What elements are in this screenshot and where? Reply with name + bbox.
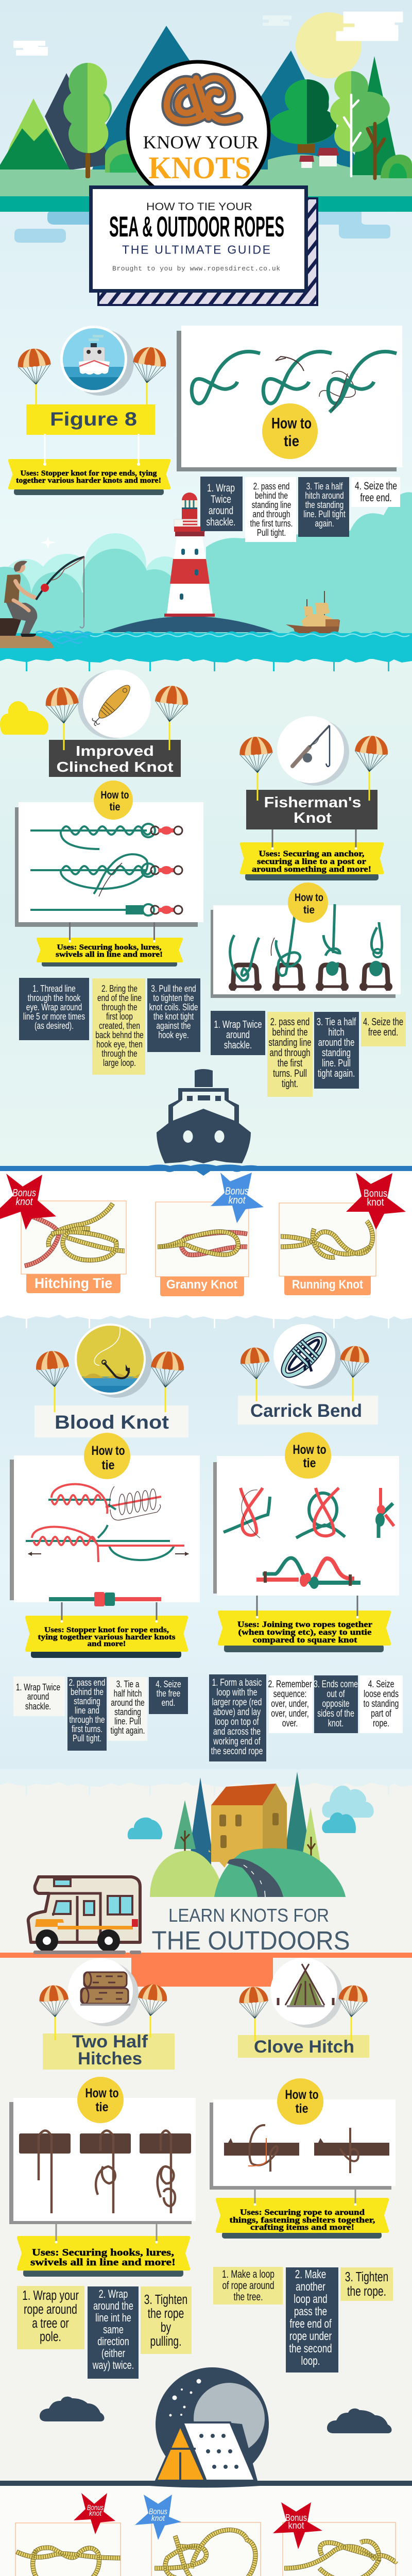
bonus star 6: Bonus [285,2513,307,2523]
step 2: (either [101,2347,126,2360]
step 1: around [226,1029,250,1041]
step 1: Twice [211,493,231,505]
water [0,633,412,659]
step 2: behind the [71,1687,104,1698]
how to tie badge: How to [285,2088,318,2102]
uses banner: securing a line to a post or [257,857,366,866]
step 1: and across the [213,1726,261,1737]
how to tie diagram [211,904,401,998]
bonus star 5: Bonus [149,2507,167,2516]
icon: logs in circle [68,1958,139,2026]
step 4: part of [371,1708,391,1719]
bonus star 5 [135,2495,181,2540]
step 3: 3. Tie a [116,1679,140,1690]
step 1 [209,1674,266,1761]
step 3: 3. Tie a half [306,481,343,492]
icon: hook in circle [75,1324,152,1398]
step 4: the free [157,1688,180,1699]
step 2: free end of [289,2318,332,2331]
step 3: 3. Ends come [314,1679,358,1690]
heading: Figure 8 [50,409,137,430]
step 2: direction [97,2335,129,2348]
step 2 [245,477,296,542]
uses banner [37,922,183,967]
step 3: 3. Pull the end [151,984,196,994]
heading [26,404,155,435]
step 1: the second rope [211,1745,263,1757]
step 2: another [296,2281,325,2294]
step 1: (as desired). [35,1021,74,1031]
step 3: 3. Tie a half [317,1016,356,1028]
step 1: around [209,504,233,517]
how to tie badge: How to [295,892,323,904]
uses banner [216,2190,389,2239]
how to tie badge: How to [293,1443,327,1457]
step 3: hook eye. [158,1030,189,1041]
knot panel: Blood Knot [10,1324,200,1751]
bonus star 1: knot [15,1196,33,1208]
subtitle panel: Brought to you by www.ropesdirect.co.uk [112,265,280,273]
step 3: standing [114,1707,141,1718]
how to tie badge: tie [303,904,315,916]
step 2: way) twice. [92,2359,134,2372]
how to tie badge: tie [303,1456,316,1470]
bonus card: Granny Knot [156,1202,249,1296]
step 1 [13,1676,65,1716]
uses banner: tying together various harder knots [38,1633,176,1641]
step 4 [359,1675,403,1733]
step 2: sequence: [273,1688,306,1700]
how to tie badge: How to [101,789,129,801]
step 2: hook eye, then [96,1039,143,1050]
step 2: end of the line [97,993,142,1004]
icon: rope coil in circle [273,1324,341,1389]
step 2: Pull tight. [257,528,286,538]
bonus star 1: Bonus [12,1188,36,1199]
step 4: 4. Seize the [355,480,397,492]
parachutes [39,1982,168,2040]
how to tie diagram [10,1455,200,1606]
knot panel: Carrick Bend [209,1324,403,1761]
how to tie badge [94,781,133,820]
bonus star 3 [346,1173,406,1230]
step 2: and through [252,509,290,520]
step 1: above) and lay [213,1706,261,1718]
step 2: 2. Make [295,2268,326,2281]
how to tie diagram [15,802,203,927]
step 1: 1. Wrap Twice [214,1019,262,1030]
how to tie badge [262,403,318,459]
step 2 [88,2286,139,2379]
bonus star 2 [211,1173,264,1223]
section heading: Learn knots for the outdoors: THE OUTDOORS [151,1926,350,1955]
step 3: the rope [148,2306,184,2321]
step 3: line. Pull tight [303,509,346,520]
step 2: same [103,2324,124,2336]
step 2: the first [278,1057,302,1069]
step 3: hitch around [305,490,344,501]
step 1: shackle. [224,1039,252,1051]
step 4: end. [162,1698,175,1708]
step 1: 1. Form a basic [212,1677,262,1688]
step 2: 2. pass end [270,1016,310,1028]
icon: camper van [28,1877,141,1954]
icon: tent in circle [270,1958,342,2028]
sailing ship [286,591,340,637]
step 3: the knot tight [153,1011,194,1022]
step 2: 2. Remember [268,1679,312,1690]
step 2: around the [93,2300,133,2313]
fisherman with rod [0,557,84,637]
subtitle panel: HOW TO TIE YOUR [146,201,252,213]
step 2: over, under, [271,1698,309,1709]
step 3 [141,2286,192,2354]
step 2: standing line [252,500,291,511]
subtitle panel: THE ULTIMATE GUIDE [122,243,270,257]
step 4: loose ends [364,1688,399,1700]
step 2: loop and [294,2293,328,2306]
step 1: shackle. [25,1701,51,1712]
step 2: turns. Pull [273,1067,307,1079]
step 2: and through [270,1047,310,1059]
step 1 [17,2286,84,2349]
icon: fishing lure in circle [78,670,151,739]
step 3: line. Pull [114,1716,141,1727]
heading: Blood Knot [55,1412,169,1433]
step 4: 4. Seize the [363,1016,403,1028]
uses banner: things, fastening shelters together, [230,2216,375,2225]
step 3: opposite [322,1698,350,1709]
step 1: of rope around [222,2279,274,2292]
step 2: Pull tight. [73,1733,101,1744]
knot panel: Figure 8 [8,326,402,542]
step 1 [213,2267,283,2304]
step 3 [298,477,349,537]
step 3: sides of the [317,1708,354,1719]
step 3 [314,1675,358,1733]
heading [35,1405,188,1437]
step 3: tight again. [318,1067,355,1079]
step 3: half hitch [114,1688,142,1699]
how to tie badge: tie [296,2102,308,2116]
knot panel: Clove Hitch [210,1958,396,2372]
step 4: rope. [373,1718,389,1729]
step 2: large loop. [103,1058,136,1069]
step 2: created, then [99,1021,140,1031]
section heading: Learn knots for the outdoors: LEARN KNOTS FOR [168,1905,329,1926]
step 2: through the [101,1048,138,1059]
uses banner: and more! [88,1640,126,1648]
parachutes [35,1349,185,1412]
how to tie diagram [9,2098,196,2224]
heading: Carrick Bend [250,1401,362,1421]
uses banner: Uses: Securing hooks, lures, [32,2247,174,2258]
parachutes [238,734,389,801]
step 3: tight again. [111,1725,145,1736]
uses banner: compared to square knot [252,1636,357,1645]
step 2 [286,2267,338,2372]
bonus star 4 [74,2493,115,2534]
heading: Clove Hitch [254,2037,354,2057]
uses banner [17,2224,190,2277]
parachutes [239,1345,370,1401]
how to tie diagram [177,326,402,471]
step 2: through the [101,1002,138,1013]
step 4: free end. [360,492,392,504]
how to tie badge: tie [102,1458,115,1472]
how to tie badge: tie [96,2100,109,2114]
step 2: back behnd the [95,1030,144,1041]
step 4: 4. Seize [156,1679,181,1690]
title badge: Know Your Knots: KNOTS [148,151,251,185]
bonus star 6 [273,2502,322,2549]
step 1: 1. Wrap your [22,2287,79,2303]
uses banner: swivels all in line and more! [30,2257,176,2268]
header scenery: mountains, trees, sun and clouds [0,12,412,243]
step 1: loop with the [217,1687,257,1698]
night scene: moon, cabin and clouds [0,2367,412,2487]
step 1: a tree or [32,2315,69,2331]
bonus card: Running Knot: Running Knot [292,1278,363,1292]
step 3: standing [322,1047,351,1059]
step 1 [211,1011,265,1055]
parachutes [238,1984,369,2041]
heading [238,2035,369,2058]
step 2: behind the [255,490,288,501]
step 1: 1. Wrap [207,482,235,494]
step 3: hitch [328,1026,345,1038]
step 4: free end. [368,1026,398,1038]
step 3: line. Pull [322,1057,351,1069]
step 3: again. [315,518,334,529]
icon: yellow cloud [0,701,48,735]
step 2: line int he [95,2312,131,2325]
bonus star 5: knot [151,2514,165,2523]
step 1: around [27,1691,49,1702]
step 1: 1. Wrap Twice [16,1682,60,1693]
step 2: standing line [268,1037,312,1048]
step 1: through the hook [28,993,81,1004]
step 1: line 5 or more times [23,1011,85,1022]
title badge: Know Your Knots: KNOW YOUR [143,132,259,152]
step 4 [351,477,400,507]
bonus card: Overhand Knot [283,2522,396,2576]
step 1: pole. [40,2329,61,2344]
how to tie badge [277,2078,323,2125]
bonus card: Hitching Tie [21,1201,126,1293]
step 2: over, under, [271,1708,309,1719]
heading [246,790,377,829]
uses banner: Uses: Stopper knot for rope ends, tying [21,469,157,478]
step 2: behind the [272,1026,308,1038]
how to tie diagram [210,2099,396,2190]
how to tie badge: How to [92,1444,125,1458]
bonus star 2: Bonus [225,1186,249,1197]
step 3: knot coils. Slide [149,1002,198,1013]
knot panel: Fisherman's Knot [211,716,406,1097]
step 2: loop. [301,2355,320,2368]
section heading: Learn knots for the outdoors [151,1905,350,1955]
step 2 [267,1012,313,1097]
bonus star 4: knot [89,2509,102,2518]
step 2 [67,1677,107,1751]
uses banner: (when towing etc), easy to untie [238,1628,372,1637]
step 2: pass the [294,2306,327,2318]
bonus card: Hitching Tie: Hitching Tie [35,1275,112,1291]
step 3 [340,2267,393,2301]
bonus star 3: knot [367,1197,384,1208]
heading: Fisherman's [264,794,362,811]
uses banner [240,829,384,880]
how to tie badge: How to [85,2086,118,2100]
step 2 [268,1675,313,1733]
how to tie badge: tie [284,433,299,450]
step 2: through the [69,1715,105,1725]
step 3 [314,1012,359,1089]
step 2: rope under [289,2330,332,2343]
bonus card: Lariot Loop [151,2522,261,2576]
step 2: standing [74,1696,100,1707]
step 3: by [161,2319,171,2335]
step 2: 2. Wrap [99,2288,128,2301]
step 3: the rope. [347,2283,386,2299]
icon: ship in circle [60,326,134,396]
uses banner: Uses: Stopper knot for rope ends, [44,1626,169,1634]
step 3: pulling. [150,2333,181,2349]
heading: Knot [294,810,332,826]
step 2: the second [289,2343,332,2355]
step 2 [92,978,145,1075]
heading [238,1396,378,1425]
step 2: tight. [282,1078,298,1090]
knot panel: Improved Clinched Knot [0,670,203,1075]
bonus star 1 [0,1174,56,1230]
step 3 [147,978,200,1052]
parachutes [16,345,168,405]
step 3: around the [111,1698,145,1708]
how to tie diagram [213,1456,399,1596]
step 3: 3. Tighten [345,2269,388,2284]
step 4 [361,1012,406,1046]
step 3 [108,1677,147,1741]
outdoors scene: house, trees, hills and clouds [128,1772,374,1897]
step 2: line and [75,1705,99,1716]
step 1: working end of [213,1736,261,1747]
step 3: against the [157,1021,191,1031]
uses banner: Uses: Securing hooks, lures, [57,943,162,952]
bonus star 2: knot [229,1195,246,1206]
heading [49,740,181,777]
uses banner: crafting items and more! [250,2223,354,2232]
bonus card: Double Overhand Knot [15,2523,121,2576]
bonus star 6: knot [288,2520,304,2531]
uses banner: swivels all in line and more! [56,951,163,959]
bonus star 3: Bonus [364,1188,387,1199]
step 4 [149,1677,188,1714]
uses banner [25,1602,188,1658]
heading: Two Half [72,2032,148,2052]
step 1: loop on top of [215,1716,259,1727]
bonus star 4: Bonus [87,2503,104,2512]
step 2: 2. Bring the [101,984,138,994]
orange road band [0,1951,412,1987]
step 3: around the [318,1037,354,1048]
heading [43,2032,175,2070]
step 2: the first turns. [250,518,293,529]
step 1: 1. Thread line [32,984,76,994]
parachutes [44,684,190,750]
uses banner [8,434,170,495]
icon: large ship silhouette on blue line [0,1069,412,1176]
step 2: first loop [106,1011,133,1022]
how to tie badge [77,2077,124,2123]
bonus card: Running Knot [279,1203,376,1295]
step 1: eye. Wrap around [26,1002,82,1013]
heading: Clinched Knot [57,759,173,775]
uses banner: Uses: Joining two ropes together [237,1620,372,1629]
step 4: 4. Seize [368,1679,394,1690]
how to tie badge: tie [109,801,121,813]
step 4: to standing [364,1698,399,1709]
fishing scene: hills, lighthouse, fisherman, ship and sea [0,492,412,671]
subtitle panel [91,188,317,305]
heading: Improved [76,743,154,759]
how to tie badge [84,1433,130,1479]
step 1: rope around [24,2301,77,2317]
how to tie badge [285,1432,331,1479]
heading: Hitches [78,2049,142,2069]
step 3: knot. [328,1718,344,1729]
how to tie badge: How to [271,415,312,432]
step 1: the tree. [233,2291,263,2303]
uses banner: around something and more! [252,865,371,874]
lighthouse [164,493,215,617]
knot panel: Two Half Hitches [9,1958,196,2379]
step 3: out of [327,1688,345,1700]
uses banner: together various harder knots and more! [16,477,161,485]
step 2: 2. pass end [253,481,289,492]
uses banner: Uses: Securing an anchor, [259,850,365,858]
step 3: the standing [305,500,344,511]
icon: coiled rope [167,78,238,121]
uses banner: Uses: Securing rope to around [240,2208,365,2217]
step 1: larger rope (red [212,1697,262,1708]
step 2: over. [282,1718,298,1729]
icon: fishing rod in circle [277,716,349,786]
step 3: to tighten the [153,993,194,1004]
title badge: Know Your Knots [128,62,269,203]
step 1 [200,477,243,531]
how to tie badge [288,883,328,923]
step 3: 3. Tighten [144,2292,187,2307]
step 1: shackle. [206,516,236,528]
step 1: 1. Make a loop [222,2268,274,2280]
uses banner [218,1596,391,1652]
step 2: 2. pass end [69,1677,105,1688]
step 2: first turns. [72,1724,102,1735]
step 1 [19,978,89,1040]
bonus card: Granny Knot: Granny Knot [166,1278,237,1292]
